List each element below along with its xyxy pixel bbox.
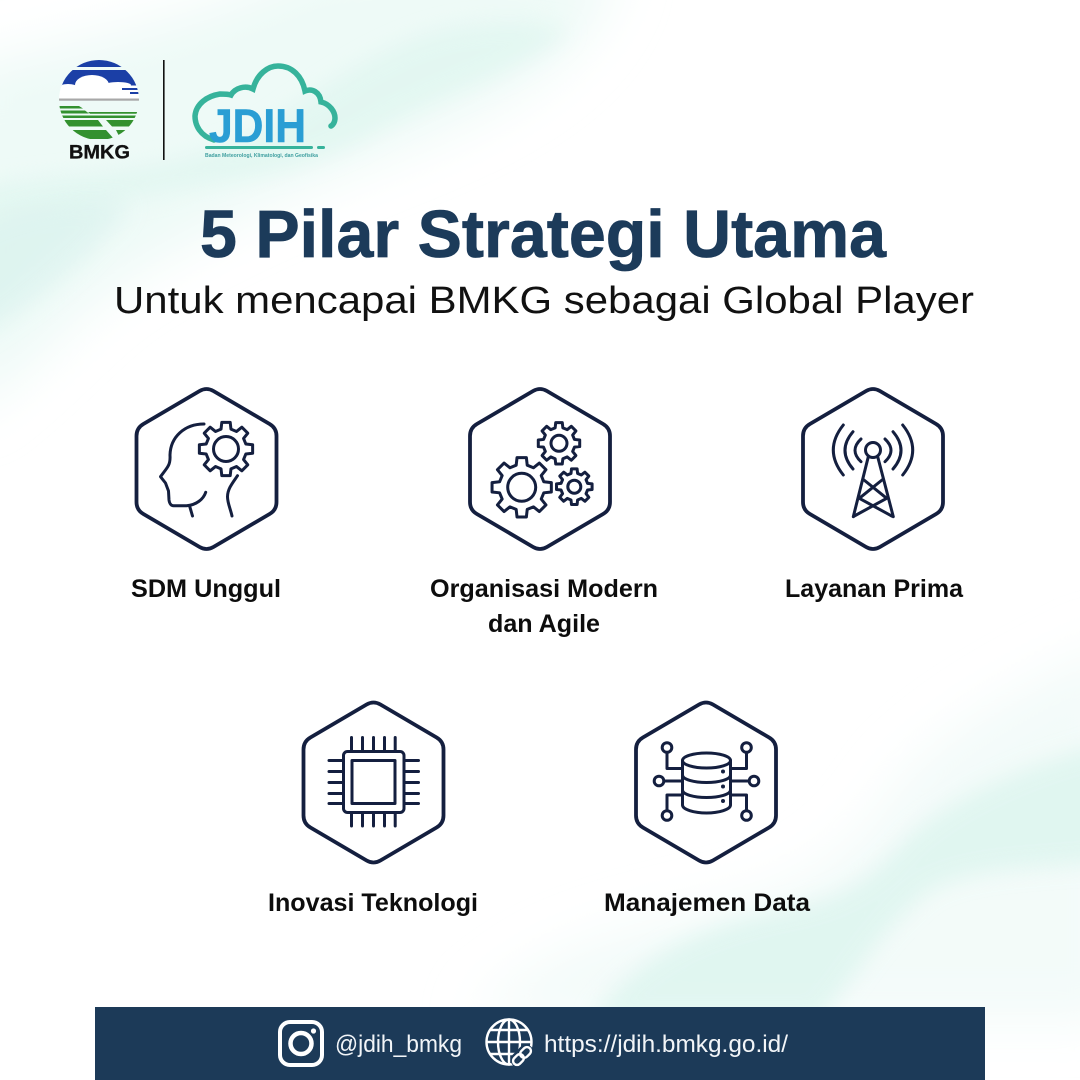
icon: head with gear xyxy=(136,389,276,549)
subtitle: Untuk mencapai BMKG sebagai Global Player xyxy=(114,280,974,322)
icon: gears xyxy=(470,389,610,549)
icon: globe with link xyxy=(486,1020,536,1070)
url: https://jdih.bmkg.go.id/ xyxy=(544,1031,788,1058)
handle: @jdih_bmkg xyxy=(335,1031,462,1058)
pillar: Inovasi Teknologi xyxy=(268,702,478,917)
logo: JDIH: JDIH xyxy=(209,99,306,152)
label: Inovasi Teknologi xyxy=(268,889,478,917)
title: 5 Pilar Strategi Utama xyxy=(200,197,887,272)
pillar: Organisasi Modern dan Agile xyxy=(430,389,658,638)
label: Organisasi Modern xyxy=(430,575,658,603)
icon: microchip xyxy=(304,702,444,862)
pillar: Layanan Prima xyxy=(785,389,964,603)
logo: JDIH: Badan Meteorologi, Klimatologi, dan Geofisika xyxy=(205,153,319,159)
icon: instagram xyxy=(280,1022,322,1065)
divider xyxy=(163,60,165,160)
footer bar xyxy=(95,1007,985,1080)
label: Layanan Prima xyxy=(785,575,964,603)
logo: BMKG: BMKG xyxy=(69,142,130,164)
label: Manajemen Data xyxy=(604,889,811,917)
label line 2: dan Agile xyxy=(488,610,600,638)
logo: BMKG xyxy=(59,60,140,164)
label: SDM Unggul xyxy=(131,575,281,603)
pillar: SDM Unggul xyxy=(131,389,281,603)
icon: signal tower xyxy=(803,389,943,549)
icon: database network xyxy=(636,702,776,862)
logo: JDIH xyxy=(195,66,335,159)
pillar: Manajemen Data xyxy=(604,702,811,917)
